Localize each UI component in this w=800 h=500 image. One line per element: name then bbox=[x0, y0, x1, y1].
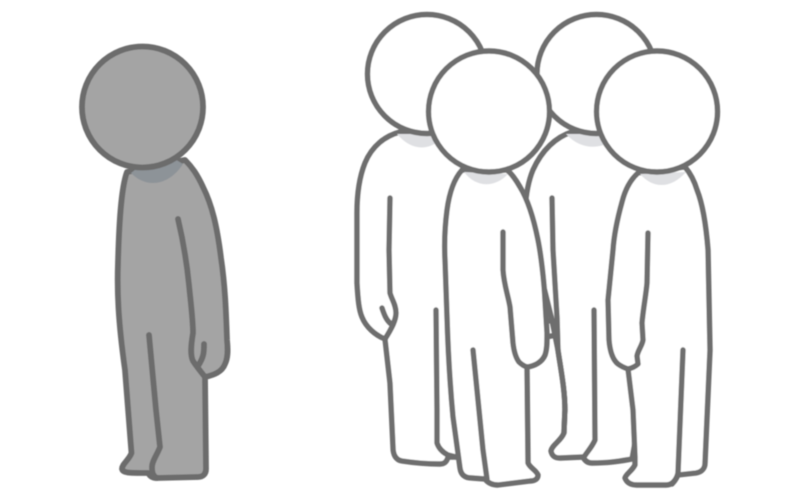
figure: isolated grey person bbox=[82, 46, 228, 478]
figure: rear right person bbox=[525, 14, 660, 463]
figure: front right person bbox=[596, 51, 718, 485]
figure: rear left person bbox=[357, 14, 486, 464]
head bbox=[368, 14, 486, 134]
head bbox=[428, 51, 550, 172]
head bbox=[596, 51, 718, 172]
figure: front left person bbox=[428, 51, 550, 485]
head bbox=[537, 14, 656, 134]
